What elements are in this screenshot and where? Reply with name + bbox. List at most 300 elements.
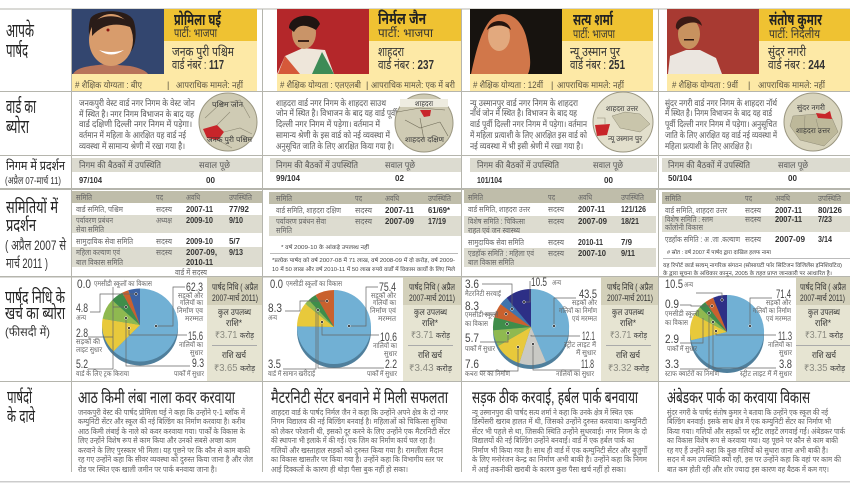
- panel: fund summary 2: पार्षद निधि ( अप्रैल: [409, 281, 456, 292]
- panel: councillor card 2: वार्ड नंबर : 237: [378, 57, 434, 72]
- chart: fund pie 4: स्टाफ क्वार्टरों का निर्माण: [665, 369, 720, 378]
- row heading: ward details: [6, 95, 37, 138]
- chart: fund pie 3: स्ट्रीट लाइट में: [564, 340, 597, 349]
- map: Sundar Nagri: सुंदर नगरी: [797, 104, 825, 112]
- chart: fund pie 4: [665, 277, 792, 378]
- panel: corporation stats 3: 00: [604, 175, 613, 185]
- chart: fund pie 1: मरम्मत: [185, 316, 203, 323]
- chart: fund pie 2: पार्कों में सुधार: [367, 369, 397, 378]
- chart: fund pie 4: अन्य: [684, 282, 694, 289]
- panel: councillor card 4: वार्ड नंबर : 244: [768, 57, 826, 72]
- panel: fund summary 1: राशि खर्च: [222, 349, 247, 360]
- panel: ward 4 details: पूर्वी दिल्ली नगर निगम में पड़ेगा। अनुसूचित: [665, 119, 778, 130]
- chart: fund pie 4: स्ट्रीट लाइट में में सुधार: [740, 369, 792, 378]
- chart: fund pie 3: 5.7: [465, 331, 479, 345]
- chart: fund pie 2: 10.6: [380, 330, 397, 344]
- row heading: councillors' claims: [7, 387, 35, 426]
- table: committees 3: पद: [548, 193, 556, 202]
- table: committees 1: [72, 191, 262, 277]
- panel: corporation stats 4: [662, 158, 850, 183]
- table: committees 2: 2007-09: [385, 216, 414, 226]
- panel: fund summary 3: राशि खर्च: [616, 349, 641, 360]
- panel: ward 1 details: व्यवस्था में सामान्य श्रेणी में रखा गया है।: [79, 141, 185, 151]
- panel: corporation stats 2: निगम की बैठकों में उपस्थिति: [276, 159, 359, 170]
- panel: fund summary 1: कुल उपलब्ध: [218, 307, 252, 318]
- panel: ward 4 details: में स्थित है। निगम विभाजन के बाद यह वार्ड: [665, 108, 773, 118]
- table: committees 1: 9/13: [229, 247, 243, 257]
- panel: claims 4: [667, 386, 846, 474]
- table: committees 4: सदस्य: [745, 235, 761, 244]
- table: committees 2: 10 में 50 लाख और वर्ष 2010-11 में 50 लाख रुपये वार्डों में विकास कार्यों के लिए मिले: [272, 265, 455, 273]
- panel: fund summary 1: ₹3.71 करोड़: [215, 330, 255, 341]
- table: committees 4: एडहॉक समिति : अ .जा .कल्याण: [665, 235, 740, 244]
- panel: councillor card 2: [277, 9, 461, 91]
- chart: fund pie 3: 12.1: [582, 329, 595, 343]
- chart: fund pie 2: 3.5: [268, 357, 281, 371]
- table: committees 4: कॉलोनी विकास: [665, 223, 704, 232]
- chart: fund pie 1: सुधार: [190, 350, 203, 357]
- table: committees 1: 9/10: [229, 215, 243, 225]
- panel: councillor card 3: न्यू उस्मान पुर: [570, 44, 621, 60]
- table: committees 1: पद: [156, 193, 164, 202]
- chart: fund pie 3: [465, 275, 598, 378]
- table: committees 4: 80/126: [818, 205, 842, 215]
- panel: fund summary 1: ₹3.65 करोड़: [214, 363, 256, 374]
- chart: fund pie 1: सड़कों की: [76, 337, 100, 346]
- panel: councillor card 1: आपराधिक मामले: नहीं: [176, 79, 244, 90]
- table: committees 3: 9/11: [621, 248, 635, 258]
- chart: fund pie 1: [76, 277, 204, 378]
- panel: fund summary 1: 2007-मार्च 2011): [212, 292, 258, 303]
- table: committees 1: 77/92: [229, 204, 249, 214]
- panel: corporation stats 1: निगम की बैठकों में उपस्थिति: [79, 159, 162, 170]
- row heading: performance in corporation: [5, 158, 66, 187]
- panel: councillor card 1: # शैक्षिक योग्यता : बीए: [75, 79, 143, 90]
- panel: ward 3 details: [470, 92, 653, 152]
- panel: claims 1: आठ किमी लंबा नाला कवर करवाया: [78, 387, 235, 407]
- panel: claims 3: न्यू उस्मानपुरा की पार्षद सत्य शर्मा ने कहा कि उनके क्षेत्र में स्थित एक: [472, 407, 634, 418]
- panel: councillor card 1: [72, 9, 257, 91]
- panel: ward 1 details: वार्ड दक्षिणी दिल्ली नगर निगम में पड़ेगा।: [79, 119, 192, 129]
- panel: claims 2: गलियों और खस्ताहाल सड़कों को दुरुस्त किया गया है। रामलीला मैदान: [271, 445, 443, 456]
- panel: claims 3: सेंटर भी पहले से था, जिसकी स्थिति उन्होंने सुधरवाई। नगर निगम के दो: [472, 426, 648, 437]
- table: committees 3: 2010-11: [578, 237, 603, 247]
- chart: fund pie 2: नालियों का: [373, 341, 397, 350]
- table: committees 1: 2009-10: [186, 215, 213, 225]
- panel: councillor card 4: # शैक्षिक योग्यता : 9वीं: [672, 79, 739, 90]
- panel: ward 2 details: जोन में स्थित है। विभाजन के बाद यह वार्ड पूर्वी: [276, 108, 398, 119]
- map: Shahdara: [395, 94, 453, 152]
- panel: councillor card 3: वार्ड नंबर : 251: [570, 57, 625, 72]
- table: committees 3: अवधि: [578, 193, 592, 202]
- panel: corporation stats 2: 02: [395, 173, 404, 183]
- panel: ward 1 details: में स्थित है। नगर निगम विभाजन के बाद यह: [79, 109, 194, 119]
- table: committees 4: 2007-11: [775, 214, 802, 224]
- table: committees 4: के द्वारा सूचना के अधिकार कानून, 2005 के तहत प्राप्त जानकारी पर आधारित है।: [663, 269, 832, 278]
- panel: councillor card 1: पार्टी: भाजपा: [174, 26, 218, 40]
- table: committees 1: पर्यावरण प्रबंधन: [76, 216, 114, 225]
- panel: councillor card 4: |: [748, 80, 750, 90]
- table: committees 2: पर्यावरण प्रबंधन सेवा: [276, 217, 327, 226]
- chart: fund pie 1: नालियों का: [179, 340, 203, 349]
- table: committees 3: 7/9: [621, 237, 632, 247]
- table: committees 3: राहत एवं जन स्वास्थ्य: [468, 226, 520, 235]
- panel: claims 3: विद्यालयों की नई बिल्डिंग उन्होंने बनवाई। वार्ड में एक हर्बल पार्क का: [472, 435, 635, 445]
- table: committees 1: सदस्य: [156, 237, 172, 246]
- table: committees 1: 2007-09,: [186, 247, 217, 257]
- table: committees 4: 3/14: [818, 234, 832, 244]
- chart: fund pie 2: एमसीडी स्कूलों का विकास: [286, 279, 342, 289]
- panel: ward 4 details: सुंदर नगरी वार्ड नगर निगम के शाहदरा नॉर्थ: [665, 98, 778, 109]
- photo: Nirmal Jain: [277, 9, 369, 74]
- panel: claims 2: मैटरनिटी सेंटर बनवाने में मिली सफलता: [271, 386, 448, 407]
- panel: fund summary 1: पार्षद निधि ( अप्रैल: [212, 281, 259, 292]
- panel: claims 2: का विकास खासतौर पर किया गया है। उन्होंने कहा कि विभागीय स्तर पर: [271, 454, 444, 464]
- table: committees 3: उपस्थिति: [621, 193, 645, 202]
- chart: fund pie 3: एवं मरम्मत: [572, 316, 597, 323]
- panel: councillor card 2: निर्मल जैन: [378, 9, 427, 28]
- row heading: performance in committees: ( अप्रैल 2007 से: [5, 236, 66, 253]
- table: committees 2: समिति: [276, 194, 292, 203]
- table: committees 1: महिला कल्याण एवं: [76, 248, 121, 257]
- chart: fund pie 3: का विकास: [465, 320, 488, 328]
- panel: councillor card 1: जनक पुरी पश्चिम: [172, 44, 234, 60]
- chart: fund pie 3: 3.6: [465, 277, 479, 291]
- table: committees 2: सदस्य: [355, 217, 372, 226]
- table: committees 2: अवधि: [385, 194, 399, 203]
- table: committees 3: विशेष समिति : चिकित्सा: [468, 217, 526, 226]
- map: Janakpuri West: जनक पुरी पश्चिम: [207, 136, 253, 144]
- panel: corporation stats 3: 101/104: [477, 175, 502, 185]
- panel: claims 3: डिस्पेंसरी खराब हालत में थी, जिसको उन्होंने दुरुस्त करवाया। कम्युनिटी: [472, 416, 648, 427]
- table: committees 2: 17/19: [428, 216, 446, 226]
- map: Janakpuri West: [199, 93, 257, 151]
- chart: fund pie 1: 2.8: [76, 326, 88, 340]
- panel: ward 4 details: महिला प्रत्याशी के लिए आरक्षित है।: [665, 141, 752, 151]
- chart: fund pie 4: एवं मरम्मत: [766, 316, 791, 323]
- panel: fund summary 3: ₹3.71 करोड़: [610, 330, 648, 341]
- panel: councillor card 4: पार्टी: निर्दलीय: [769, 26, 821, 41]
- row heading: performance in committees: प्रदर्शन: [6, 215, 36, 235]
- panel: ward 3 details: नॉर्थ जोन में स्थित है। विभाजन के बाद यह: [470, 108, 577, 118]
- panel: claims 2: निगम विद्यालय की नई बिल्डिंग बनवाई है। महिलाओं को चिकित्सा सुविधा: [271, 416, 448, 427]
- panel: ward 3 details: में महिला प्रत्याशी के लिए आरक्षित इस वार्ड को: [470, 130, 588, 140]
- panel: claims 2: आई दिक्कतों के कारण ही थोड़ा पैसा बुक नहीं हो सका।: [271, 464, 408, 475]
- panel: fund summary 2: 2007-मार्च 2011): [409, 292, 455, 303]
- chart: fund pie 1: सड़कों और: [178, 291, 203, 300]
- panel: corporation stats 4: 00: [788, 173, 797, 183]
- chart: fund pie 2: सड़कों और: [371, 291, 396, 300]
- chart: fund pie 1: गलियों का: [180, 298, 203, 307]
- panel: councillor card 2: |: [366, 80, 368, 90]
- table: committees 2: [269, 192, 461, 273]
- table: committees 1: 2009-10: [186, 236, 213, 246]
- panel: fund summary 3: 2007-मार्च 2011): [607, 292, 653, 303]
- panel: ward 1 details: [79, 93, 257, 151]
- table: committees 1: उपस्थिति: [229, 193, 253, 202]
- panel: ward 2 details: [276, 94, 453, 152]
- panel: corporation stats 1: 97/104: [79, 175, 102, 185]
- table: committees 3: वार्ड समिति, शाहदरा उत्तर: [468, 205, 531, 214]
- table: committees 1: अवधि: [186, 193, 200, 202]
- table: committees 1: 5/7: [229, 236, 240, 246]
- panel: fund summary 2: कुल उपलब्ध: [414, 307, 448, 318]
- table: committees 3: समिति: [468, 193, 483, 202]
- panel: corporation stats 1: [72, 158, 262, 185]
- panel: claims 3: सड़क ठीक करवाई, हर्बल पार्क बनवाया: [472, 387, 638, 407]
- row heading: fund expenditure: [5, 286, 65, 339]
- panel: claims 1: रह गए उन्होंने कहा कि सीवर व्यवस्था को दुरुस्त किया जाना है और जेल: [78, 454, 253, 465]
- panel: ward 3 details: नई व्यवस्था में भी इसी श्रेणी में रखा गया है।: [470, 141, 583, 151]
- row heading: performance in corporation: (अप्रैल 07-मार्च 11): [5, 175, 61, 187]
- chart: fund pie 2: वार्ड में सामान खरीदाई: [268, 369, 316, 378]
- row heading: performance in committees: [5, 197, 66, 271]
- table: committees 2: वार्ड समिति, शाहदरा दक्षिण: [276, 206, 341, 215]
- chart: fund pie 3: नालियों का सुधार: [556, 369, 594, 378]
- chart: fund pie 2: अन्य: [268, 315, 278, 322]
- panel: corporation stats 3: सवाल पूछे: [593, 159, 624, 171]
- panel: corporation stats 2: 99/104: [276, 173, 300, 183]
- chart: fund pie 2: मरम्मत: [378, 316, 396, 323]
- panel: councillor card 4: [667, 9, 850, 91]
- panel: claims 1: करवाने के लिए पुरस्कार भी मिला। यह पूछने पर कि कौन से काम बाकी: [78, 445, 251, 456]
- map: New Usmanpur: न्यू उस्मान पुर: [608, 136, 642, 144]
- chart: fund pie 1: एमसीडी स्कूलों का विकास: [94, 279, 152, 289]
- panel: corporation stats 2: सवाल पूछे: [385, 159, 416, 171]
- table: committees 3: बाल विकास समिति: [468, 258, 514, 267]
- panel: councillor card 3: सत्य शर्मा: [573, 10, 614, 29]
- table: committees 4: अवधि: [775, 194, 790, 203]
- row heading: fund expenditure: पार्षद निधि के: [5, 286, 65, 307]
- chart: fund pie 4: 71.4: [776, 287, 791, 301]
- table: committees 3: 2007-09: [578, 216, 607, 226]
- row heading: ward details: ब्योरा: [6, 116, 30, 138]
- panel: fund summary 1: [207, 277, 262, 381]
- chart: fund pie 3: 10.5: [531, 275, 547, 289]
- table: committees 4: पद: [745, 194, 753, 203]
- panel: councillor card 2: पार्टी: भाजपा: [378, 26, 434, 40]
- panel: claims 1: आठ किमी लंबाई के नाले को कवर करवाया गया। पार्कों के विकास के: [78, 426, 246, 436]
- panel: corporation stats 4: निगम की बैठकों में उपस्थिति: [668, 159, 751, 170]
- chart: fund pie 3: अन्य: [552, 280, 562, 287]
- row heading: your councillor: [6, 19, 34, 62]
- chart: fund pie 4: 0.9: [665, 297, 679, 311]
- chart: fund pie 1: अन्य: [76, 315, 87, 322]
- panel: ward 2 details: सामान्य श्रेणी के इस वार्ड को नई व्यवस्था में: [276, 130, 391, 140]
- panel: claims 3: में आई तकनीकी खराबी के कारण कुछ पैसा खर्च नहीं हो सका।: [472, 464, 626, 475]
- chart: fund pie 3: 7.6: [465, 357, 479, 371]
- table: committees 1: वार्ड में सदस्य: [175, 268, 207, 277]
- panel: claims 1: [78, 387, 253, 474]
- panel: ward 4 details: [665, 93, 842, 151]
- panel: fund summary 3: कुल उपलब्ध: [612, 307, 645, 318]
- panel: fund summary 4: कुल उपलब्ध: [808, 307, 841, 318]
- table: committees 3: सदस्य: [548, 238, 564, 247]
- panel: claims 2: की स्थापना भी इलाके में की गई। एक जिम का निर्माण कार्य चल रहा है।: [271, 435, 435, 445]
- row heading: ward details: वार्ड का: [6, 95, 37, 118]
- table: committees 3: एडहॉक समिति : महिला एवं: [468, 249, 535, 258]
- table: committees 4: सदस्य: [745, 215, 761, 224]
- chart: fund pie 1: 0.0: [77, 277, 91, 291]
- chart: fund pie 3: 11.8: [581, 357, 594, 371]
- chart: fund pie 4: गलियों का निर्माण: [753, 306, 792, 315]
- table: committees 4: यह रिपोर्ट कार्ड सत्यम् नागरिक संगठन (सोसायटी फॉर सिटिजन विजिलेंस इनिशियटिव): [663, 261, 842, 269]
- chart: fund pie 1: 4.8: [76, 301, 88, 315]
- table: committees 3: 18/21: [621, 216, 639, 226]
- table: committees 1: बाल विकास समिति: [76, 258, 123, 267]
- panel: councillor card 1: प्रोमिला घई: [174, 10, 222, 29]
- chart: fund pie 1: निर्माण एव: [177, 306, 203, 315]
- table: committees 2: 61/69*: [428, 205, 451, 215]
- panel: fund summary 3: ₹3.32 करोड़: [608, 363, 650, 374]
- row heading: your councillor: पार्षद: [6, 39, 29, 62]
- panel: fund summary 2: ₹3.71 करोड़: [411, 330, 451, 341]
- table: committees 4: 2007-11: [775, 205, 802, 215]
- chart: fund pie 3: मैटरनिटी सरवाई: [465, 289, 502, 298]
- panel: fund summary 4: ₹3.35 करोड़: [804, 363, 846, 374]
- table: committees 4: 7/23: [818, 214, 832, 224]
- panel: claims 1: कम्युनिटी सेंटर और स्कूल की नई बिल्डिंग का निर्माण करवाया है। करीब: [78, 416, 245, 427]
- table: committees 1: वार्ड समिति, पश्चिम: [76, 205, 123, 214]
- chart: fund pie 1: 5.2: [76, 357, 88, 371]
- table: committees 2: सदस्य: [355, 206, 372, 215]
- row heading: councillors' claims: पार्षदों: [7, 387, 32, 407]
- chart: fund pie 1: 62.3: [186, 280, 203, 294]
- panel: ward 1 details: वर्तमान में महिला के आरक्षित यह वार्ड नई: [79, 130, 187, 140]
- chart: fund pie 4: एमसीडी स्कूलों: [665, 309, 699, 319]
- table: committees 1: सदस्य: [156, 248, 172, 257]
- table: committees 3: 2007-11: [578, 204, 605, 214]
- chart: fund pie 4: पार्कों में सुधार: [667, 344, 697, 353]
- panel: claims 3: के लिए मनोरंजन केन्द्र का निर्माण अभी बाकी है। उन्होंने कहा कि निगम: [472, 454, 647, 464]
- chart: fund pie 2: [268, 277, 397, 378]
- panel: claims 3: निर्माण भी किया गया है। साथ ही वार्ड में एक कम्युनिटी सेंटर और बुजुर्गों: [472, 445, 648, 456]
- table: committees 4: विशेष समिति : स्लम: [665, 215, 713, 224]
- chart: fund pie 2: गलियों का: [373, 298, 396, 307]
- chart: fund pie 1: लाइट सुधार: [76, 347, 102, 354]
- table: committees 4: # स्रोत : वर्ष 2007 में पार्षद द्वारा दाखिल हलफ नामा: [667, 248, 772, 256]
- table: committees 4: सदस्य: [745, 206, 761, 215]
- table: committees 2: *प्रत्येक पार्षद को वर्ष 2007-08 में 71 लाख, वर्ष 2008-09 में दो करोड़, वर्ष 2009-: [272, 256, 455, 264]
- chart: fund pie 4: सुधार: [779, 350, 792, 357]
- panel: councillor card 3: पार्टी: भाजपा: [573, 27, 616, 41]
- panel: corporation stats 3: [470, 158, 657, 185]
- map: Shahdara: शाहदरा: [415, 101, 433, 108]
- chart: fund pie 3: सड़कों और: [572, 298, 597, 307]
- panel: ward 1 details: जनकपुरी वेस्ट वार्ड नगर निगम के वेस्ट जोन: [79, 98, 195, 109]
- panel: fund summary 2: राशि खर्च: [418, 349, 443, 360]
- chart: fund pie 3: 8.3: [465, 299, 479, 313]
- panel: fund summary 2: [403, 277, 461, 381]
- panel: fund summary 2: ₹3.43 करोड़: [409, 363, 453, 374]
- panel: ward 2 details: अनुसूचित जाति के लिए आरक्षित किया गया है।: [276, 141, 394, 152]
- table: committees 4: समिति: [665, 194, 681, 203]
- panel: councillor card 2: आपराधिक मामले: एक में बरी: [371, 79, 456, 90]
- row heading: councillors' claims: के दावे: [7, 405, 35, 426]
- table: committees 3: 121/126: [621, 204, 646, 214]
- panel: councillor card 1: वार्ड नंबर : 117: [172, 57, 224, 72]
- map: Sundar Nagri: शाहदरा उत्तर: [796, 128, 830, 135]
- table: committees 4: 2007-09: [775, 234, 805, 244]
- chart: fund pie 3: एमसीडी स्कूलों: [465, 310, 498, 320]
- photo: Promila Ghai: [72, 9, 164, 74]
- panel: councillor card 3: आपराधिक मामले: नहीं: [557, 79, 625, 90]
- panel: fund summary 4: राशि खर्च: [812, 349, 837, 360]
- row heading: performance in corporation: निगम में प्रदर्शन: [6, 158, 66, 173]
- panel: councillor card 1: |: [167, 80, 169, 90]
- panel: corporation stats 2: [270, 158, 461, 183]
- panel: councillor card 2: शाहदरा: [378, 44, 404, 59]
- panel: fund summary 3: पार्षद निधि ( अप्रैल: [607, 281, 654, 292]
- table: committees 4: वार्ड समिति, शाहदरा उत्तर: [665, 206, 728, 215]
- panel: ward 3 details: वार्ड पूर्वी दिल्ली नगर निगम में पड़ेगा। वर्तमान: [470, 119, 587, 130]
- table: committees 1: सेवा समिति: [76, 225, 104, 234]
- panel: claims 2: [271, 386, 451, 475]
- chart: fund pie 1: 15.6: [188, 329, 203, 343]
- panel: claims 3: [472, 387, 648, 475]
- chart: fund pie 4: का विकास: [665, 319, 688, 327]
- table: committees 1: अध्यक्ष: [156, 216, 172, 225]
- table: committees 2: समिति: [276, 226, 292, 235]
- panel: ward 3 details: न्यू उस्मानपुर वार्ड नगर निगम के शाहदरा: [470, 98, 579, 109]
- panel: ward 2 details: दिल्ली नगर निगम में पड़ेगा। वर्तमान में: [276, 119, 381, 129]
- chart: fund pie 1: वार्ड के लिए ट्रक किराया: [76, 369, 129, 378]
- map: New Usmanpur: शाहदरा उत्तर: [606, 106, 638, 113]
- panel: councillor card 4: आपराधिक मामले: नहीं: [758, 79, 826, 90]
- panel: fund summary 1: राशि*: [226, 317, 242, 328]
- panel: corporation stats 4: सवाल पूछे: [778, 159, 809, 171]
- chart: fund pie 3: 43.5: [579, 287, 597, 301]
- photo: Santosh Kumar: [667, 9, 759, 74]
- map: Janakpuri West: पश्चिम जोन: [212, 101, 243, 109]
- table: committees 3: [464, 189, 656, 267]
- row heading: performance in committees: समितियों में: [6, 197, 58, 217]
- panel: claims 1: रोड पर स्थित एक खाली जमीन पर पार्क बनवाया जाना है।: [78, 464, 217, 474]
- chart: fund pie 4: 3.8: [779, 357, 792, 371]
- chart: fund pie 3: में सुधार: [576, 348, 596, 357]
- photo: Satya Sharma: [470, 9, 562, 74]
- table: committees 4: उपस्थिति: [818, 194, 842, 203]
- chart: fund pie 2: 0.0: [270, 277, 283, 291]
- table: committees 2: * वर्ष 2009-10 के आंकड़े उपलब्ध नहीं: [281, 243, 370, 251]
- panel: fund summary 2: राशि*: [422, 317, 438, 328]
- chart: fund pie 3: पार्कों में सुधार: [465, 344, 495, 353]
- chart: fund pie 4: 11.3: [778, 329, 792, 343]
- panel: claims 2: को लेकर परेशानी थी, इसको दूर करने के लिए उन्होंने एक मैटरनिटी सेंटर: [271, 426, 451, 437]
- chart: fund pie 2: 8.3: [268, 301, 282, 315]
- table: committees 1: सामुदायिक सेवा समिति: [76, 237, 133, 247]
- table: committees 1: 2007-11: [186, 204, 213, 214]
- chart: fund pie 2: निर्माण एवं: [370, 306, 396, 315]
- chart: fund pie 4: 2.9: [665, 332, 679, 346]
- map: Shahdara: शाहदरा दक्षिण: [405, 136, 445, 144]
- table: committees 2: 2007-11: [385, 205, 414, 215]
- table: committees 3: सदस्य: [548, 217, 564, 226]
- table: committees 3: सदस्य: [548, 249, 564, 258]
- panel: corporation stats 1: 00: [206, 175, 215, 185]
- panel: claims 1: लिए उन्होंने विशेष रूप से काम किया और उनको सबसे अच्छा काम: [78, 435, 236, 445]
- row heading: fund expenditure: खर्च का ब्योरा: [5, 303, 65, 323]
- panel: councillor card 4: सुंदर नगरी: [768, 44, 806, 60]
- table: committees 4: [662, 192, 850, 278]
- panel: corporation stats 3: निगम की बैठकों में उपस्थिति: [477, 159, 560, 170]
- table: committees 1: समिति: [76, 193, 92, 202]
- map: New Usmanpur: [593, 92, 653, 152]
- chart: fund pie 3: गलियों का निर्माण: [559, 306, 598, 315]
- panel: corporation stats 4: 50/104: [668, 173, 692, 183]
- table: committees 2: उपस्थिति: [428, 194, 452, 203]
- chart: fund pie 3: कचरा घर का निर्माण: [465, 369, 511, 378]
